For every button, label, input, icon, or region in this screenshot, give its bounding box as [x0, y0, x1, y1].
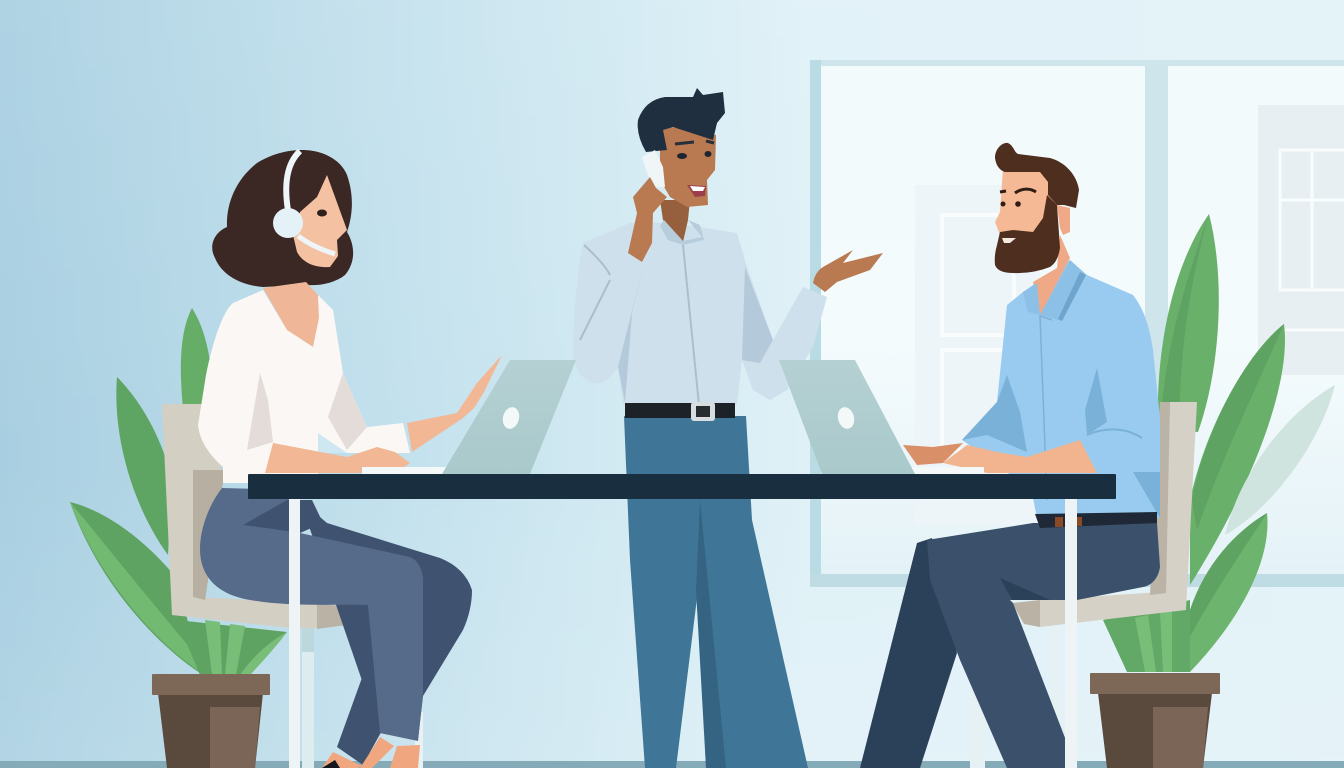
near leg: [927, 523, 1160, 768]
laptop right: [779, 360, 984, 474]
hair: [638, 88, 725, 152]
person: woman with headset: [198, 150, 502, 768]
floor strip: [0, 761, 1344, 768]
facial features: [1000, 189, 1036, 207]
leaves: [1158, 214, 1219, 432]
hair back: [212, 150, 353, 287]
face: [293, 175, 347, 267]
headset earpiece: [273, 208, 303, 238]
thigh and lower leg: [200, 488, 423, 741]
ear: [1057, 205, 1070, 235]
window with faint blueprints: [810, 60, 1344, 587]
near arm and hand: [265, 443, 410, 473]
belt: [1035, 512, 1157, 528]
open hand: [813, 250, 883, 292]
far hand: [903, 443, 963, 465]
table: [248, 474, 1116, 768]
person: bearded man: [860, 143, 1160, 768]
belt: [625, 403, 735, 418]
trousers: [624, 416, 808, 768]
neck: [1033, 235, 1070, 315]
face: [660, 125, 716, 207]
pot: [1098, 693, 1212, 768]
shirt: [962, 260, 1160, 518]
right chair: [970, 402, 1197, 768]
far arm and hand: [407, 355, 502, 452]
headset: [286, 151, 335, 254]
eye: [317, 210, 327, 216]
far leg: [860, 538, 957, 768]
pot: [158, 693, 263, 768]
shirt: [573, 223, 827, 405]
leaves: [181, 308, 212, 410]
white blouse: [198, 290, 410, 483]
left plant: [70, 308, 287, 768]
collar: [1023, 260, 1086, 321]
right plant: [1090, 214, 1335, 768]
left chair: [162, 404, 423, 768]
face: [995, 168, 1058, 235]
near arm and hand: [943, 440, 1097, 473]
neck: [263, 282, 319, 347]
collar: [660, 220, 704, 245]
laptop left: [362, 360, 576, 474]
hand holding phone: [628, 177, 667, 262]
person: standing man on phone: [573, 88, 883, 768]
hair: [995, 143, 1079, 208]
beard: [995, 195, 1060, 273]
facial features: [675, 141, 714, 197]
neck: [660, 200, 690, 242]
far leg: [337, 650, 385, 765]
phone: [642, 150, 665, 187]
trousers outer shadow: [300, 500, 472, 740]
feet: [322, 752, 362, 768]
